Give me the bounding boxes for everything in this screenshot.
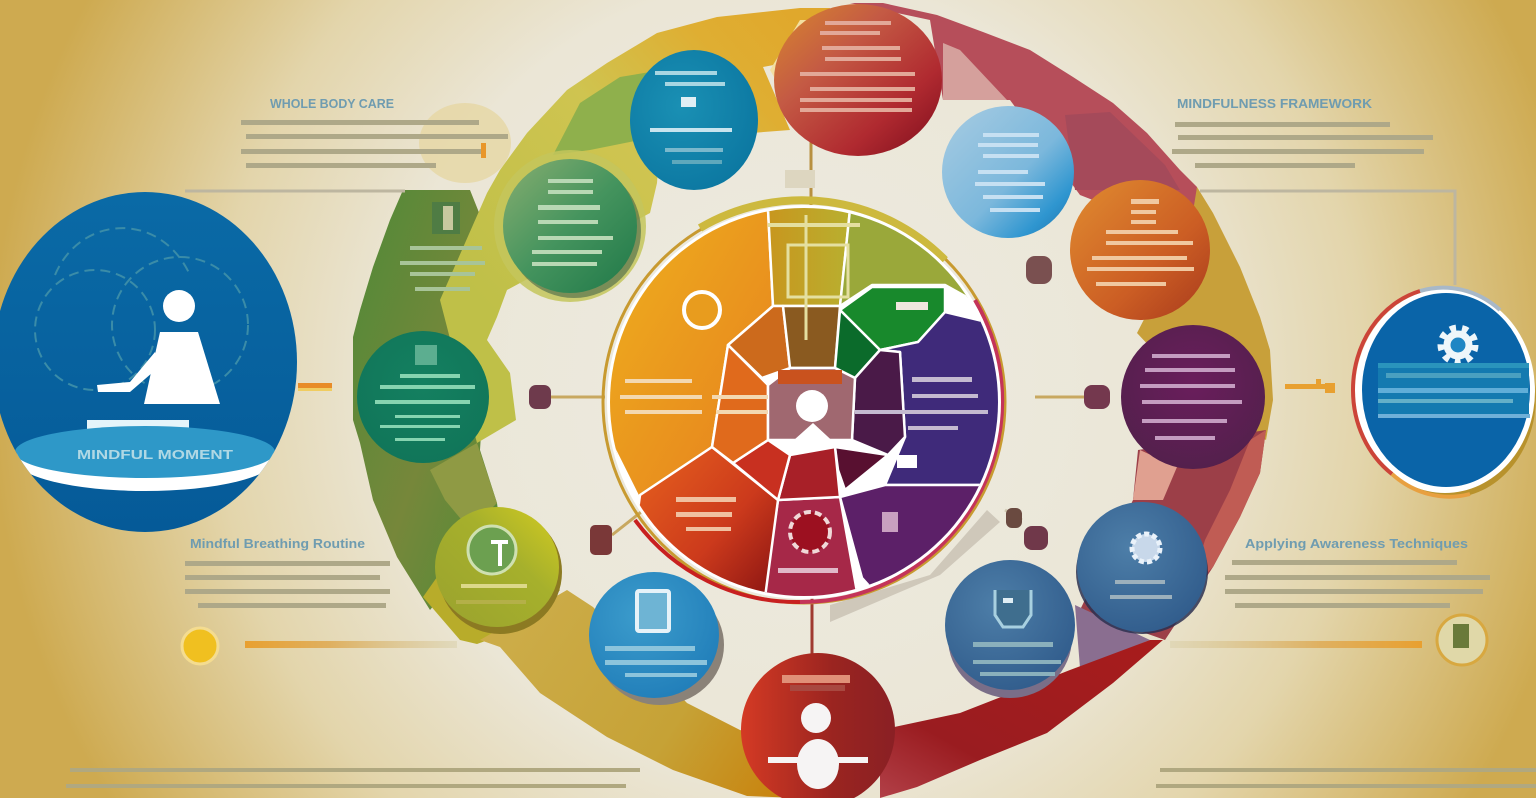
center hub — [768, 368, 855, 440]
icon: gear — [1441, 328, 1475, 362]
hub top accent — [778, 370, 842, 384]
mid ring: red — [733, 440, 790, 500]
heading: top right: MINDFULNESS FRAMEWORK — [1177, 96, 1373, 111]
wheel sector: lower purple — [842, 484, 980, 585]
bar: bottom left — [245, 641, 457, 648]
mid ring: maroon — [836, 448, 885, 488]
footer text right — [1156, 768, 1536, 788]
circle: slate blue right — [1076, 502, 1208, 634]
pale top-left blob — [419, 103, 511, 183]
text block: lower right — [1225, 560, 1490, 608]
icon: gear — [1132, 534, 1160, 562]
ring: pale pink patch — [1133, 450, 1177, 500]
ring: bottom-right red — [880, 640, 1163, 798]
icon: top lamp — [768, 215, 860, 340]
mid ring: orange diamond — [728, 306, 790, 378]
connector lines — [185, 130, 1455, 660]
left big blue circle — [0, 192, 297, 532]
arrow: left — [298, 383, 332, 391]
arrow: right — [1285, 379, 1335, 393]
bar: bottom right — [1170, 641, 1422, 648]
wheel sector: right purple — [881, 311, 998, 484]
circle: purple — [1121, 325, 1265, 469]
wheel sector: bottom crimson — [765, 498, 856, 596]
ring: right rose — [1080, 430, 1266, 640]
orange tick — [481, 143, 486, 158]
crimson label — [778, 568, 838, 573]
heading: lower right: Applying Awareness Techniques — [1245, 536, 1468, 551]
wheel labels: left — [620, 379, 768, 414]
mid ring: left orange — [712, 345, 768, 463]
icon: tablet — [995, 590, 1031, 627]
label box — [1378, 363, 1530, 418]
ring: top-right pale patch — [943, 43, 1007, 100]
small marker — [897, 455, 917, 468]
ring: right gold — [1137, 187, 1273, 440]
icon: central person — [785, 390, 840, 448]
text block: top right — [1172, 122, 1433, 168]
lower purple icon — [882, 512, 898, 532]
ring: top-left green panel — [553, 72, 650, 155]
circle: slate blue lower — [945, 560, 1075, 698]
ring: bottom-left gold — [480, 590, 800, 798]
heading: top left — [241, 96, 508, 168]
icon: clipboard — [637, 591, 669, 631]
circle: teal top — [630, 50, 758, 190]
heading: lower left: Mindful Breathing Routine — [190, 536, 365, 551]
wheel sector: olive upper right — [838, 213, 968, 305]
mid ring: green — [835, 310, 880, 378]
wheel labels: lower left — [676, 497, 736, 531]
circle: green left — [357, 331, 489, 463]
icon: green ring glyph — [432, 202, 460, 234]
circle: lime — [435, 507, 562, 634]
icon: small ring — [684, 292, 720, 328]
icon: person — [768, 703, 868, 789]
icon: gear in crimson sector — [790, 512, 830, 552]
pedestal — [87, 420, 189, 434]
ring: lilac patch — [1075, 605, 1150, 668]
text block: lower left — [185, 561, 390, 608]
circle: light blue — [942, 106, 1074, 238]
small connector nodes — [529, 170, 1110, 555]
icon: green glyph — [415, 345, 437, 365]
text block: top left — [241, 120, 508, 168]
circle: red top — [774, 4, 942, 156]
ring: top-right crimson — [850, 3, 1197, 240]
footer text left — [66, 768, 640, 788]
bottom right icon — [1437, 615, 1487, 665]
heading: lower right — [1225, 536, 1490, 608]
wheel labels: green — [896, 302, 928, 310]
circle: orange — [1070, 180, 1210, 320]
circle: red bottom — [741, 653, 895, 798]
outer ring — [353, 3, 1273, 798]
central wheel — [602, 196, 1006, 604]
heading: top right — [1172, 96, 1433, 168]
wheel sector: left orange — [610, 211, 772, 495]
ring: lower olive patch — [430, 443, 497, 530]
circle: blue lower left — [589, 572, 724, 705]
right blue circle — [1353, 288, 1536, 498]
decorative orbit lines — [35, 228, 248, 393]
icon: seated person — [97, 290, 220, 404]
icon: tree badge — [468, 526, 516, 574]
ring: right rose edge — [1190, 430, 1266, 590]
wheel sector: top gold — [766, 208, 850, 306]
wheel shadow — [830, 510, 1000, 622]
wheel sector: lower left orange-red — [638, 446, 780, 592]
green ring upper text — [400, 202, 485, 291]
ring: bottom-left lime — [423, 530, 560, 644]
ring: top-left band — [440, 8, 830, 443]
wheel labels: right — [855, 377, 988, 430]
banner text: MINDFUL MOMENT — [77, 447, 233, 462]
banner ellipse — [15, 426, 275, 491]
heading: top left: WHOLE BODY CARE — [270, 96, 394, 111]
mid ring: dark purple — [852, 350, 905, 455]
wheel sector: green — [840, 287, 945, 350]
ring: gold notch — [770, 20, 815, 105]
ring: dark rose patch — [1065, 112, 1180, 190]
bottom left sun icon — [182, 628, 218, 664]
heading: lower left — [185, 536, 390, 608]
ring: green left — [353, 190, 500, 610]
circle: dark green top left — [494, 150, 646, 302]
mid ring: brown — [783, 306, 840, 368]
mid ring: crimson — [778, 447, 840, 500]
